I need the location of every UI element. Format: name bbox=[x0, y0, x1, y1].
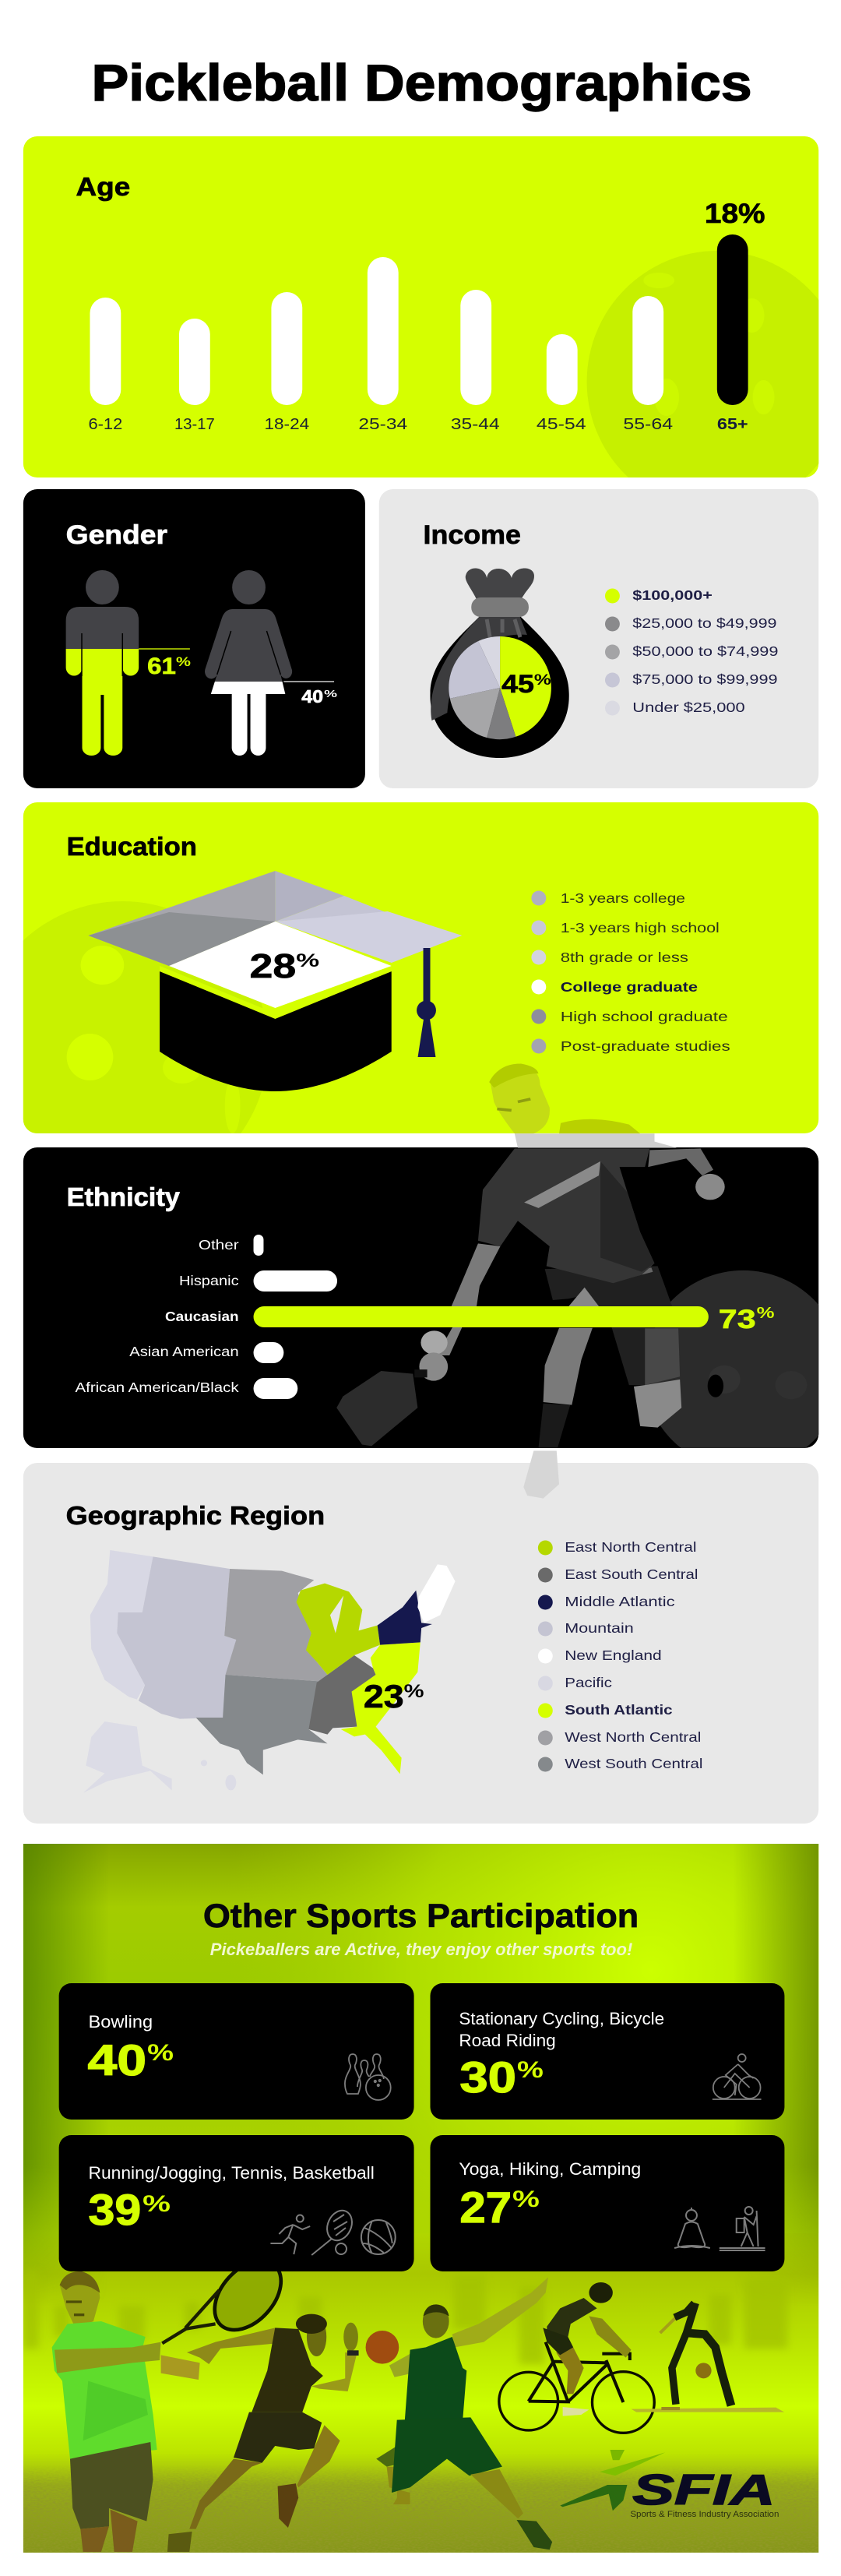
card: running tennis basketball bbox=[59, 2135, 414, 2271]
card: bowling: 40 bbox=[87, 2035, 146, 2084]
icon: basketball bbox=[361, 2220, 396, 2254]
bar chart: ethnicity: African American/Black bbox=[76, 1380, 239, 1395]
heading: gender: Gender bbox=[66, 520, 167, 550]
heading: age: Age bbox=[76, 172, 130, 201]
legend: geographic region bbox=[538, 1539, 702, 1771]
bar chart: ethnicity: Asian American bbox=[129, 1344, 239, 1359]
icon: graduation cap bbox=[88, 871, 462, 1091]
legend: income: $75,000 to $99,999 bbox=[632, 671, 777, 687]
icon: graduation cap: % bbox=[296, 950, 319, 971]
bar chart: ethnicity: 73 bbox=[719, 1305, 756, 1334]
icon: tennis racket bbox=[311, 2207, 357, 2255]
icon: money bag pie: 45 bbox=[501, 670, 534, 698]
icon: woman 40 percent: % bbox=[324, 688, 338, 700]
icon: money bag pie bbox=[430, 568, 569, 758]
map: united states regions bbox=[83, 1550, 456, 1793]
legend: geographic region: East South Central bbox=[565, 1566, 698, 1582]
legend: education: High school graduate bbox=[561, 1009, 728, 1024]
legend: education: College graduate bbox=[561, 979, 698, 995]
bar chart: age: 55-64 bbox=[623, 416, 673, 433]
logo: SFIA bbox=[560, 2450, 779, 2519]
card: yoga hiking camping bbox=[430, 2135, 784, 2271]
card: yoga hiking camping: % bbox=[512, 2187, 540, 2212]
card: yoga hiking camping: Yoga, Hiking, Camping bbox=[459, 2159, 641, 2179]
map: united states regions: % bbox=[404, 1681, 424, 1702]
bar chart: age: 35-44 bbox=[451, 416, 500, 433]
panel: other sports participation bbox=[23, 1844, 818, 2553]
bar chart: ethnicity: Caucasian bbox=[165, 1309, 239, 1324]
card: yoga hiking camping: 27 bbox=[459, 2183, 512, 2232]
card: cycling: Road Riding bbox=[459, 2031, 556, 2050]
panel: income bbox=[379, 489, 818, 788]
bar chart: age: 6-12 bbox=[88, 416, 122, 433]
legend: education: 8th grade or less bbox=[561, 950, 688, 965]
map: united states regions: 23 bbox=[364, 1678, 404, 1714]
icon: money bag pie: % bbox=[534, 672, 551, 689]
bar chart: age: 13-17 bbox=[174, 416, 215, 433]
legend: geographic region: East North Central bbox=[565, 1539, 696, 1555]
icon: woman 40 percent: 40 bbox=[301, 686, 323, 707]
title: Pickleball Demographics bbox=[91, 54, 752, 111]
skyline bbox=[23, 2271, 787, 2364]
panel: ethnicity background bbox=[23, 1147, 818, 1448]
panel: education bbox=[23, 802, 819, 1133]
yoga pose bbox=[632, 2303, 784, 2412]
heading: geographic region: Geographic Region bbox=[66, 1501, 325, 1530]
card: running tennis basketball: 39 bbox=[88, 2185, 141, 2234]
legend: income: $50,000 to $74,999 bbox=[632, 643, 778, 659]
logo: SFIA: Sports & Fitness Industry Association bbox=[630, 2510, 779, 2519]
heading: ethnicity: Ethnicity bbox=[67, 1182, 181, 1211]
card: cycling: % bbox=[517, 2057, 544, 2083]
cyclist bbox=[499, 2282, 654, 2433]
card: bowling bbox=[59, 1983, 414, 2120]
bar chart: ethnicity: Other bbox=[199, 1237, 239, 1253]
icon: man 61 percent: % bbox=[176, 654, 191, 669]
runner bbox=[167, 2314, 413, 2552]
bar chart: age bbox=[88, 234, 748, 433]
icon: bowling bbox=[345, 2054, 391, 2100]
legend: education: 1-3 years high school bbox=[561, 920, 720, 936]
legend: income bbox=[605, 587, 778, 715]
card: running tennis basketball: Running/Jogging, Tennis, Basketball bbox=[88, 2163, 375, 2183]
card: cycling: Stationary Cycling, Bicycle bbox=[459, 2009, 664, 2028]
bar chart: age: 45-54 bbox=[537, 416, 586, 433]
bar chart: age: 65+ bbox=[717, 416, 748, 433]
icon: woman 40 percent bbox=[205, 570, 338, 756]
heading: education: Education bbox=[67, 832, 197, 861]
legend: geographic region: West South Central bbox=[565, 1756, 702, 1771]
panel: geographic region background bbox=[23, 1463, 818, 1824]
pickleball watermark bbox=[23, 901, 263, 1133]
legend: education: Post-graduate studies bbox=[561, 1038, 730, 1054]
icon: cyclist bbox=[713, 2054, 762, 2099]
legend: geographic region: New England bbox=[565, 1647, 662, 1663]
photo: pickleball player bbox=[336, 1063, 841, 1499]
icon: runner bbox=[270, 2215, 310, 2254]
legend: income: $25,000 to $49,999 bbox=[632, 615, 776, 631]
card: cycling bbox=[430, 1983, 784, 2120]
icon: graduation cap: 28 bbox=[250, 947, 296, 985]
bar chart: ethnicity bbox=[76, 1235, 775, 1399]
photo: athletes on a field bbox=[23, 2248, 787, 2552]
bar chart: age: 25-34 bbox=[358, 416, 407, 433]
tennis player bbox=[52, 2248, 294, 2552]
legend: education: 1-3 years college bbox=[561, 890, 685, 906]
legend: geographic region: South Atlantic bbox=[565, 1702, 673, 1718]
panel: age bbox=[23, 136, 819, 477]
texture: grass bbox=[23, 2465, 818, 2553]
legend: geographic region: Mountain bbox=[565, 1620, 634, 1636]
card: cycling: 30 bbox=[459, 2053, 516, 2102]
card: running tennis basketball: % bbox=[143, 2191, 171, 2217]
icon: man 61 percent bbox=[66, 570, 191, 756]
basketball player bbox=[392, 2277, 552, 2550]
legend: education bbox=[531, 890, 730, 1054]
legend: income: $100,000+ bbox=[632, 587, 713, 603]
card: bowling: % bbox=[147, 2040, 174, 2066]
subheading: Pickeballers are Active, they enjoy other sports too! bbox=[210, 1940, 632, 1959]
legend: geographic region: West North Central bbox=[565, 1729, 701, 1745]
legend: income: Under $25,000 bbox=[632, 700, 745, 715]
pickleball watermark bbox=[587, 251, 819, 477]
icon: yoga bbox=[674, 2208, 710, 2248]
value: 18 percent: 18% bbox=[705, 199, 765, 229]
heading: income: Income bbox=[424, 520, 521, 550]
bar chart: ethnicity: % bbox=[757, 1305, 775, 1322]
icon: hiker bbox=[720, 2207, 765, 2250]
legend: geographic region: Middle Atlantic bbox=[565, 1594, 675, 1609]
icon: man 61 percent: 61 bbox=[147, 654, 176, 679]
bar chart: ethnicity: Hispanic bbox=[179, 1273, 239, 1288]
panel: gender bbox=[23, 489, 365, 788]
card: bowling: Bowling bbox=[88, 2012, 153, 2032]
legend: geographic region: Pacific bbox=[565, 1675, 612, 1690]
heading: other sports participation: Other Sports Participation bbox=[203, 1898, 639, 1935]
bar chart: age: 18-24 bbox=[264, 416, 309, 433]
logo: SFIA: SFIA bbox=[632, 2465, 775, 2514]
